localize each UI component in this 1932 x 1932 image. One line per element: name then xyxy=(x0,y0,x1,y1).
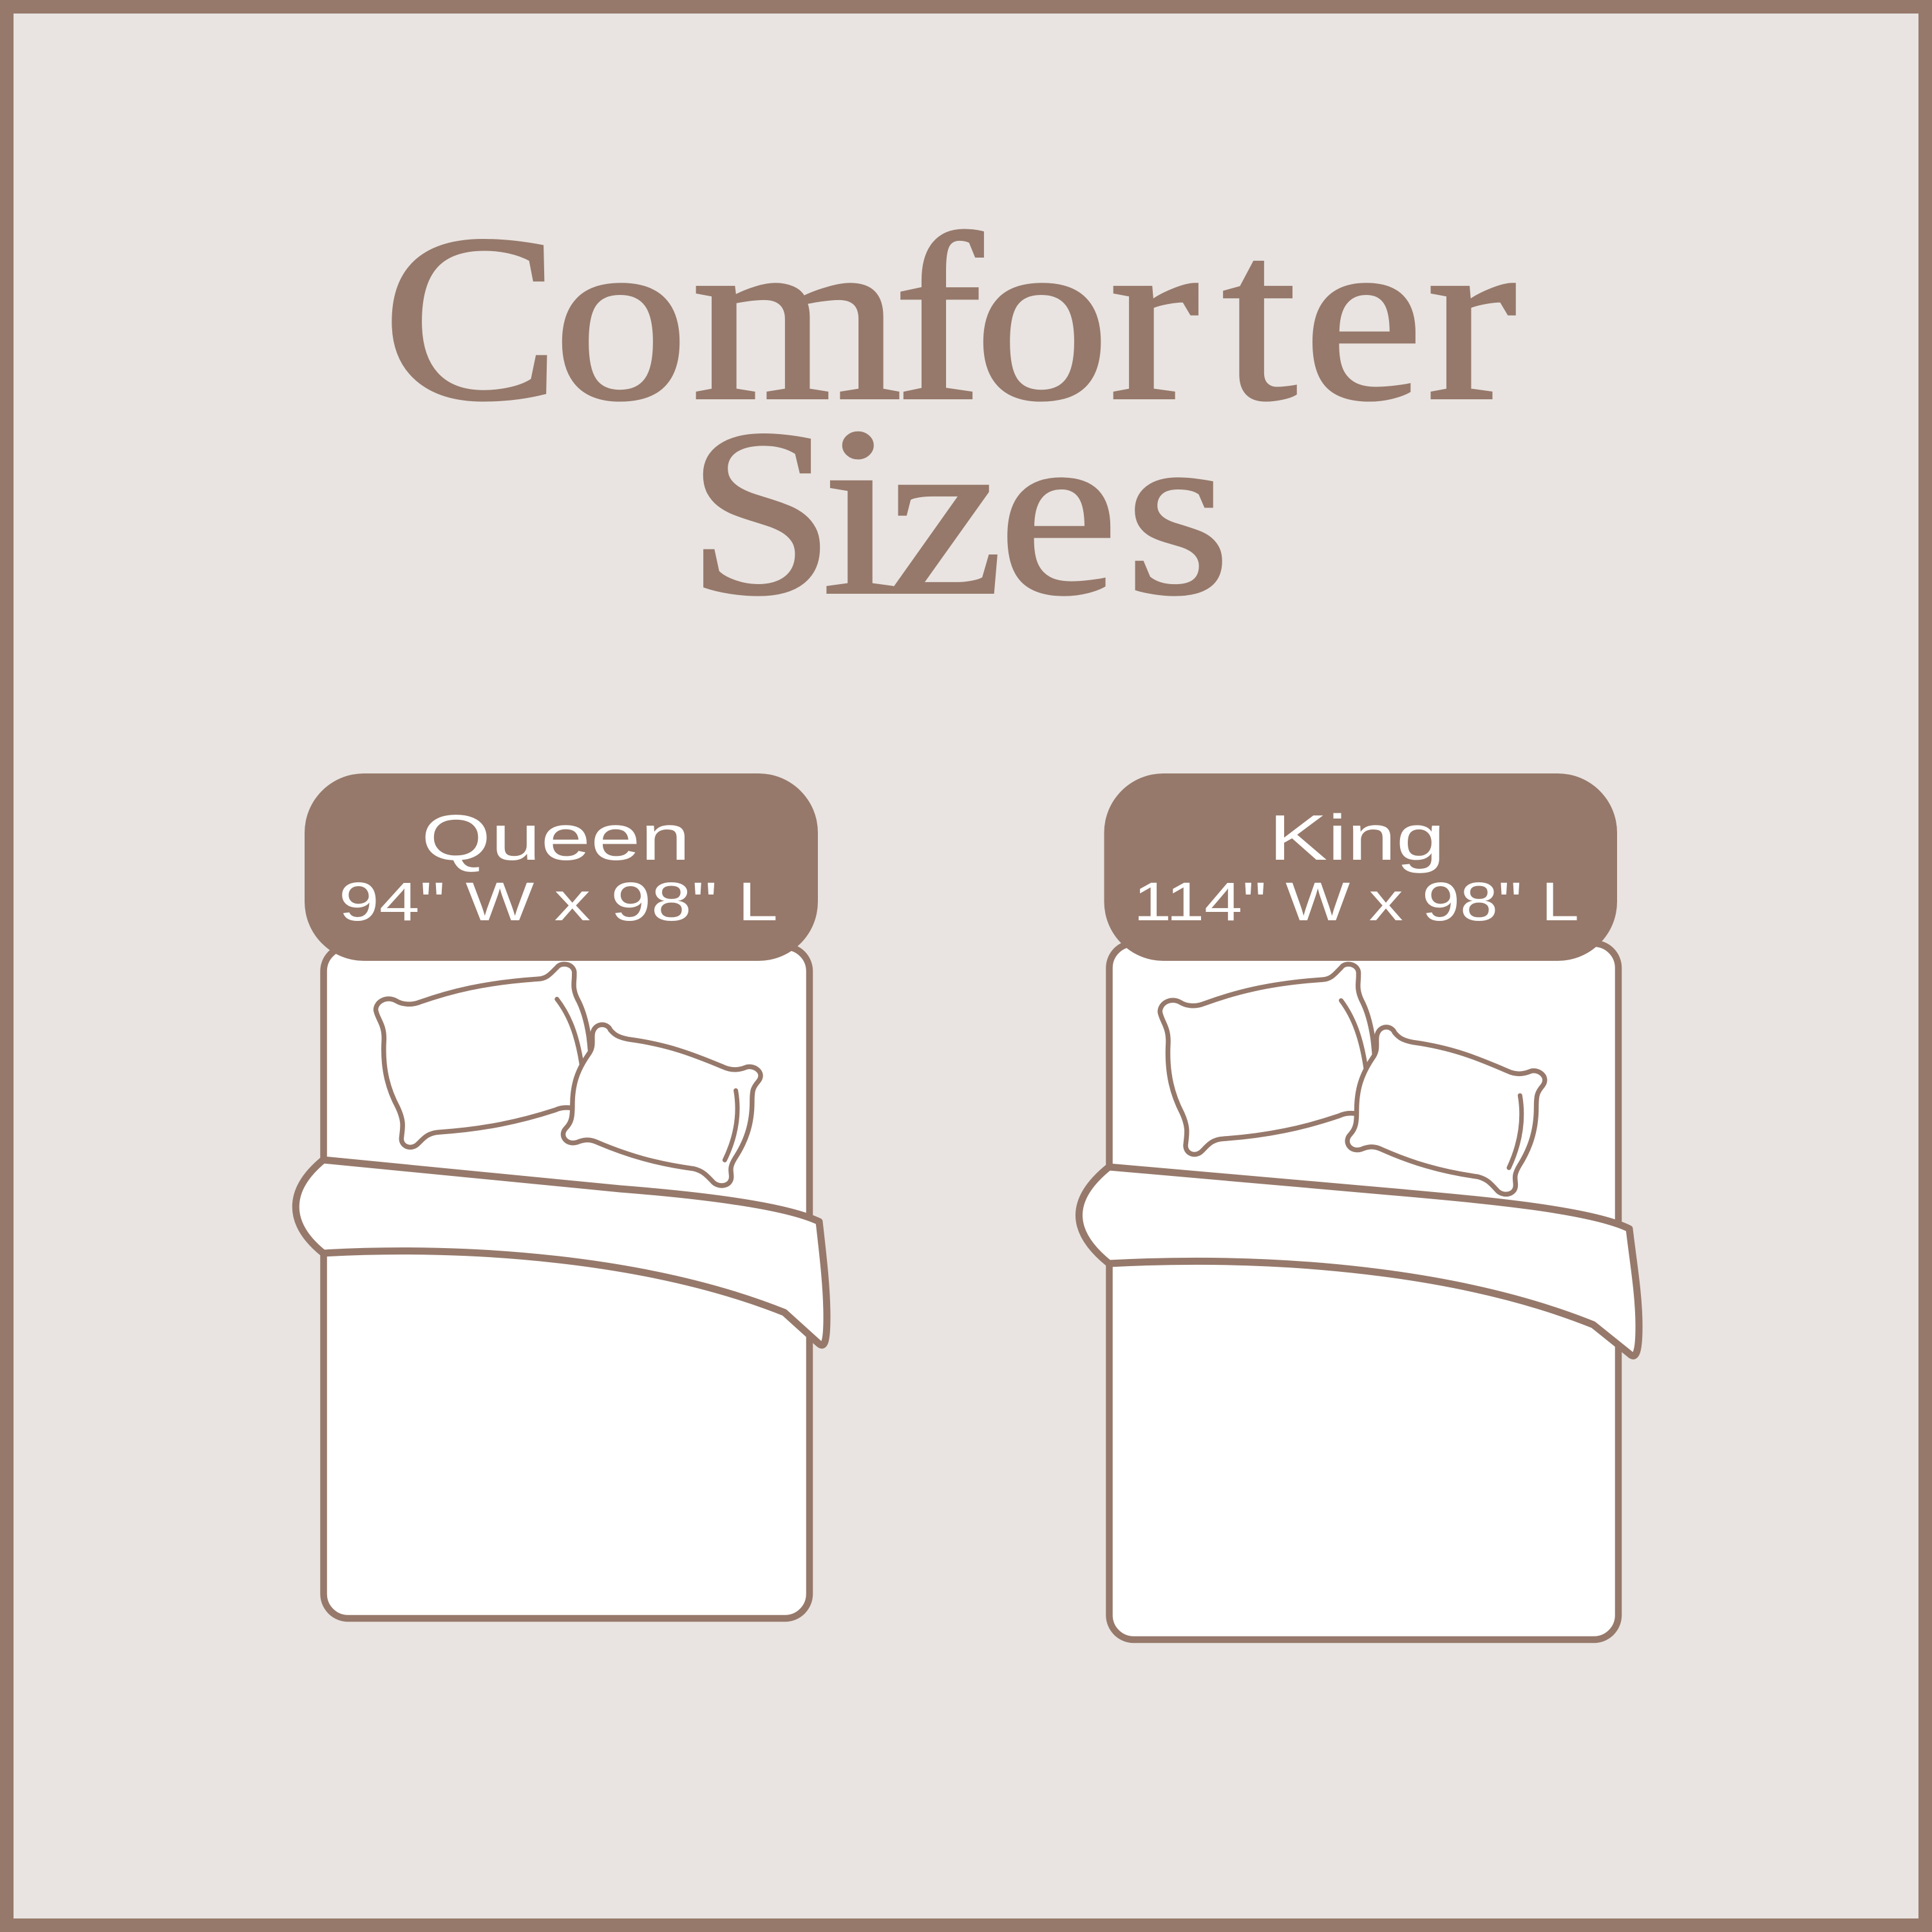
king label pill xyxy=(1104,773,1617,961)
queen comforter fold xyxy=(296,1160,827,1345)
title line 2: z xyxy=(888,386,1003,643)
left pillow fold xyxy=(557,999,582,1065)
title line 2: S xyxy=(687,380,835,644)
right pillow fold xyxy=(1509,1095,1522,1168)
left pillow xyxy=(1160,964,1375,1155)
queen pillows xyxy=(376,964,761,1186)
title line 1: f xyxy=(894,185,985,450)
right pillow xyxy=(1347,1027,1545,1194)
left pillow xyxy=(376,964,591,1147)
king pillows xyxy=(1160,964,1545,1194)
panel: king xyxy=(1079,773,1639,1640)
title line 1: orter xyxy=(974,184,1517,451)
right pillow fold xyxy=(724,1090,737,1160)
right pillow xyxy=(563,1025,761,1186)
title line 2: es xyxy=(998,378,1231,645)
queen dimensions: 94" W x 98" L xyxy=(339,871,778,932)
title xyxy=(383,184,1517,645)
title line 2: i xyxy=(822,378,897,645)
king bed outline xyxy=(1109,943,1618,1640)
king comforter fold xyxy=(1079,1167,1639,1356)
queen label pill xyxy=(305,773,818,961)
queen bed outline xyxy=(323,947,810,1618)
panel: queen xyxy=(296,773,827,1618)
queen name: Queen xyxy=(421,802,690,874)
king name: King xyxy=(1269,802,1445,874)
title line 1: om xyxy=(553,184,902,451)
title line 1: C xyxy=(383,185,560,450)
left pillow fold xyxy=(1341,1001,1366,1068)
king dimensions: 114" W x 98" L xyxy=(1133,871,1579,932)
